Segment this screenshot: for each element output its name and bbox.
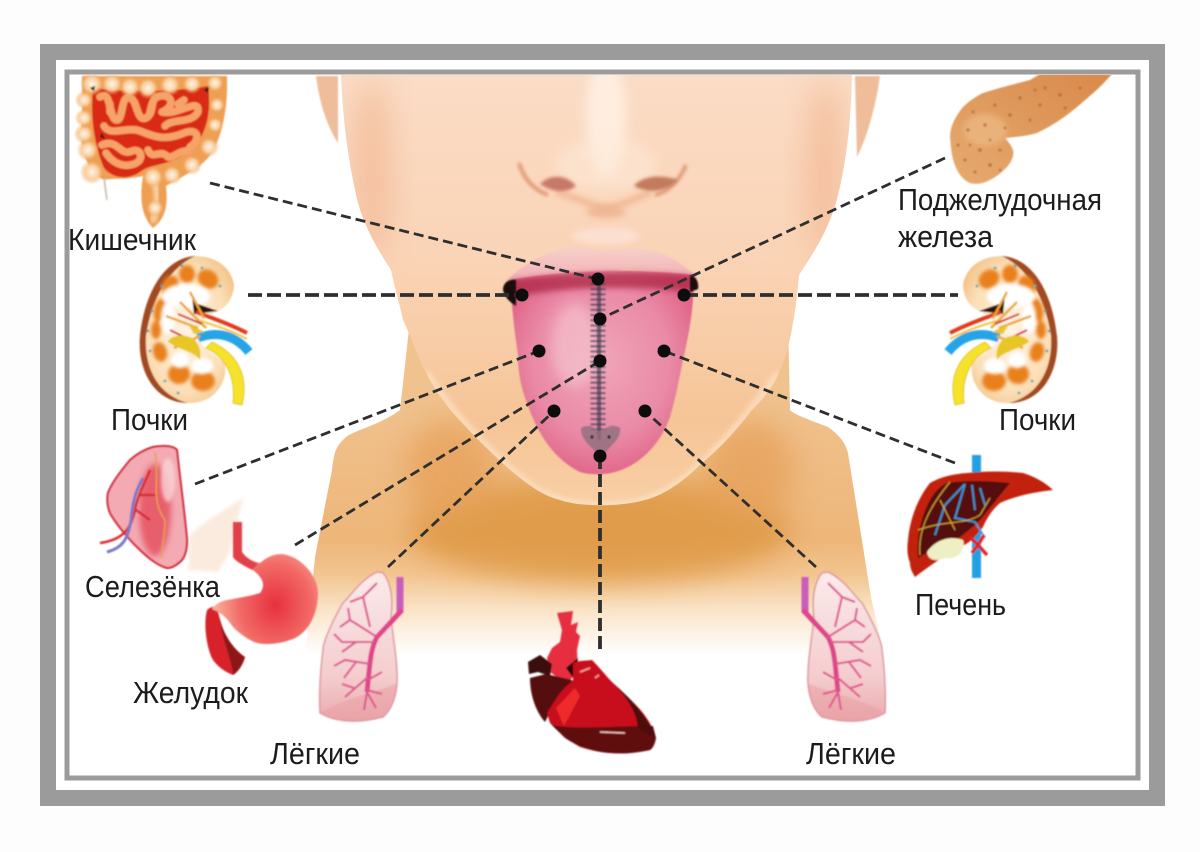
icon: right lung (803, 572, 885, 721)
icon: left kidney (140, 256, 249, 405)
mouth corners (503, 275, 698, 306)
line: left kidney (248, 293, 522, 297)
icon: right kidney (948, 256, 1057, 405)
label: spleen: Селезёнка (85, 569, 221, 604)
line: stomach (295, 361, 600, 545)
cheek shading (352, 80, 392, 260)
photo: face, neck and tongue (188, 53, 900, 665)
icon: left lung (320, 572, 402, 721)
icon: liver (907, 455, 1053, 578)
label: stomach: Желудок (133, 675, 248, 710)
line: right lung (645, 411, 816, 567)
label: right kidney: Почки (999, 402, 1076, 437)
nose (586, 53, 626, 177)
icon: stomach (205, 522, 318, 675)
connector lines (195, 158, 958, 650)
tongue highlight (551, 303, 599, 387)
tongue points (516, 272, 690, 462)
label: pancreas second line: железа (898, 219, 994, 254)
label: pancreas: Поджелудочная (898, 182, 1102, 217)
icon: pancreas (950, 74, 1112, 184)
line: spleen (195, 351, 539, 484)
label: left lung: Лёгкие (270, 736, 360, 771)
lips (506, 247, 696, 281)
tongue upper shade (510, 273, 693, 298)
shoulder wisp (188, 498, 243, 572)
line: right kidney (684, 293, 958, 297)
label: liver: Печень (915, 587, 1006, 622)
jaw rim (426, 373, 779, 505)
line: heart (598, 456, 602, 650)
nostrils (540, 177, 678, 191)
label: right lung: Лёгкие (806, 736, 896, 771)
line: liver (664, 351, 955, 463)
line: left lung (388, 411, 554, 567)
label: left kidney: Почки (111, 402, 188, 437)
label: intestine: Кишечник (68, 222, 196, 257)
spine on tongue (581, 283, 620, 452)
face (341, 75, 852, 506)
icon: heart (528, 611, 656, 753)
ears (316, 76, 880, 157)
neck and shoulders (306, 332, 880, 648)
line: pancreas (600, 158, 945, 319)
icon: spleen (100, 446, 187, 568)
icon: intestine (74, 72, 227, 228)
tongue (510, 271, 693, 474)
line: intestine (210, 183, 597, 279)
